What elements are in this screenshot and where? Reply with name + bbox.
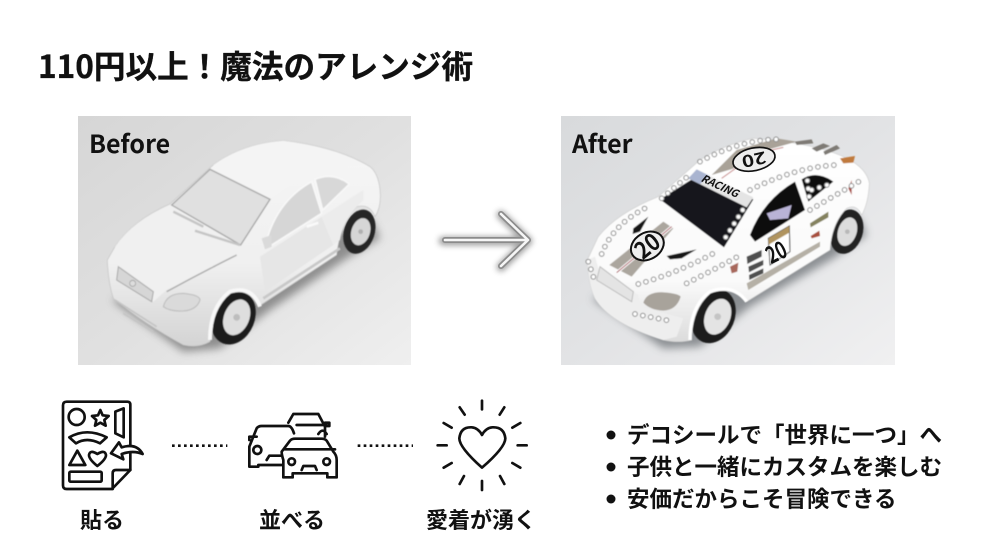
icon: glowing heart [438, 401, 527, 490]
panel: before photo [78, 116, 411, 365]
bullet list [606, 418, 942, 514]
before label: Before [89, 125, 170, 161]
title: 110円以上！魔法のアレンジ術 [38, 42, 473, 88]
after label: After [571, 125, 633, 161]
bullet 2: 子供と一緒にカスタムを楽しむ [627, 450, 942, 482]
after car illustration [587, 138, 869, 350]
sticker: number 20 hood: 20 [627, 224, 667, 266]
sticker: number 20 roof: 20 [740, 146, 768, 173]
sticker: door number: 20 [759, 231, 792, 271]
sticker: number 20 roof [731, 144, 777, 175]
icon: lined up cars [249, 414, 337, 477]
sticker: racing banner: RACING [699, 171, 742, 202]
dotted connector 1 [172, 442, 227, 450]
label: affection: 愛着が湧く [426, 503, 536, 535]
process icons [63, 401, 527, 490]
before car illustration [107, 141, 381, 352]
bullet 3: 安価だからこそ冒険できる [627, 482, 897, 514]
icon: sticker sheet [63, 402, 143, 489]
panel: after photo [561, 116, 895, 365]
label: paste: 貼る [80, 503, 124, 535]
bullet 1: デコシールで「世界に一つ」へ [627, 418, 942, 450]
dotted connector 2 [358, 442, 413, 450]
arrow [443, 214, 528, 267]
label: line up: 並べる [259, 503, 325, 535]
